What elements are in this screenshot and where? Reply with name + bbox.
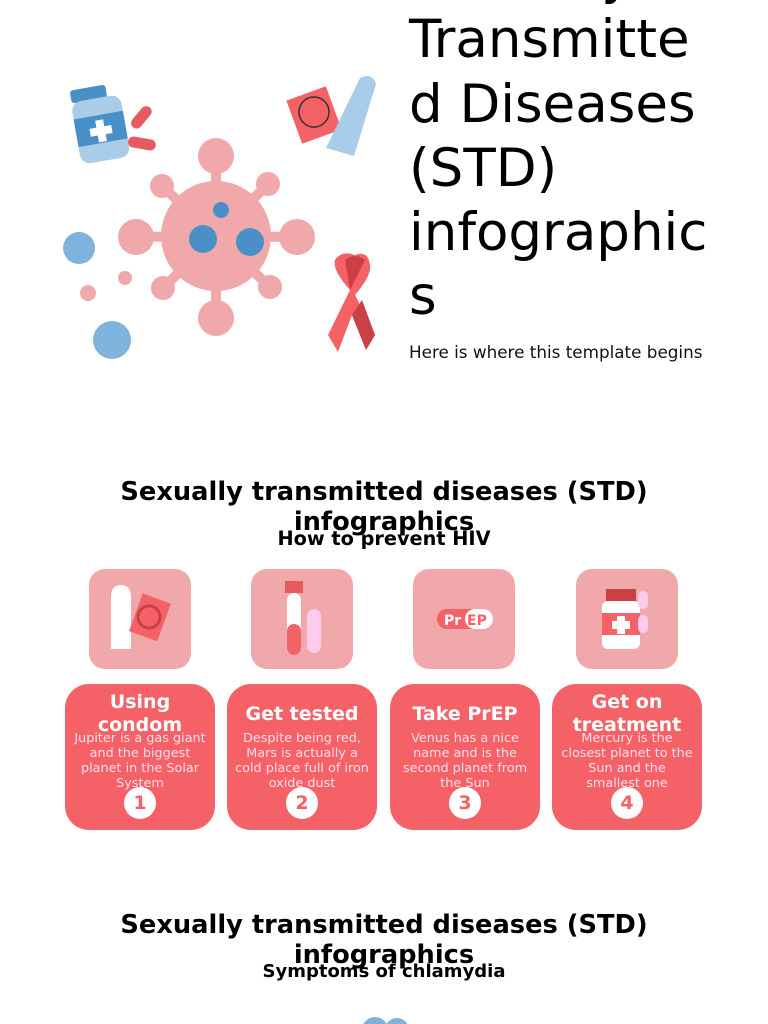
title: infographic: [409, 202, 707, 263]
subheading: symptoms: Symptoms of chlamydia: [262, 961, 506, 982]
card 3: take PrEP: the Sun: [440, 776, 490, 791]
title: [408, 0, 707, 327]
card 4: treatment: smallest one: [586, 776, 668, 791]
card 2: get tested: [227, 684, 377, 830]
card 4: treatment: [552, 684, 702, 830]
card 2: get tested: 2: [295, 792, 309, 814]
card 1: using condom: [65, 684, 215, 830]
card 4: treatment: 4: [620, 792, 634, 814]
card 3: take PrEP: [390, 684, 540, 830]
card 1: using condom: planet in the Solar: [81, 761, 199, 776]
icon box: treatment: [576, 569, 678, 669]
card 3: take PrEP: 3: [458, 792, 472, 814]
card 1: using condom: and the biggest: [90, 746, 190, 761]
section heading: prevention: [120, 477, 648, 537]
title: Transmitte: [409, 9, 690, 70]
card 4: treatment: treatment: [573, 714, 681, 736]
card 2: get tested: cold place full of iron: [235, 761, 369, 776]
card 3: take PrEP: second planet from: [403, 761, 527, 776]
card 1: using condom: Jupiter is a gas giant: [74, 731, 206, 746]
card 2: get tested: Despite being red,: [243, 731, 361, 746]
card 1: using condom: System: [116, 776, 164, 791]
hero illustration: [63, 76, 376, 359]
icon: pill bottle: [69, 82, 131, 165]
card 2: get tested: Get tested: [245, 703, 359, 725]
card 2: get tested: Mars is actually a: [246, 746, 358, 761]
section heading: chlamydia: infographics: [294, 940, 474, 970]
card 1: using condom: condom: [98, 714, 182, 736]
card 4: treatment: closest planet to the: [561, 746, 693, 761]
section heading: chlamydia: [120, 910, 648, 970]
icon: virus: [80, 138, 315, 336]
card 3: take PrEP: Take PrEP: [412, 703, 518, 725]
title: s: [409, 266, 437, 327]
title: (STD): [409, 138, 557, 199]
icon box: PrEP pill: [413, 569, 515, 669]
icon box: PrEP pill: Pr: [444, 613, 461, 629]
card 2: get tested: oxide dust: [269, 776, 335, 791]
card 1: using condom: 1: [133, 792, 147, 814]
icon box: PrEP pill: EP: [467, 613, 487, 629]
section heading: prevention: Sexually transmitted diseases (STD): [120, 477, 648, 507]
icon: ribbon: [328, 253, 375, 352]
subheading: how to prevent HIV: How to prevent HIV: [277, 527, 490, 550]
icon: condom: [286, 76, 376, 156]
title: d Diseases: [409, 74, 696, 135]
section heading: chlamydia: Sexually transmitted diseases (STD): [120, 910, 648, 940]
card 4: treatment: Mercury is the: [581, 731, 673, 746]
section heading: prevention: infographics: [294, 507, 474, 537]
card 3: take PrEP: Venus has a nice: [411, 731, 519, 746]
icon box: condom: [89, 569, 191, 669]
icon box: HIV test: [251, 569, 353, 669]
subtitle: Here is where this template begins: [409, 342, 702, 362]
card 1: using condom: Using: [110, 691, 170, 713]
card 4: treatment: Sun and the: [588, 761, 666, 776]
card 4: treatment: Get on: [592, 691, 662, 713]
card 3: take PrEP: name and is the: [413, 746, 517, 761]
icon: blue shapes: [364, 1017, 408, 1024]
